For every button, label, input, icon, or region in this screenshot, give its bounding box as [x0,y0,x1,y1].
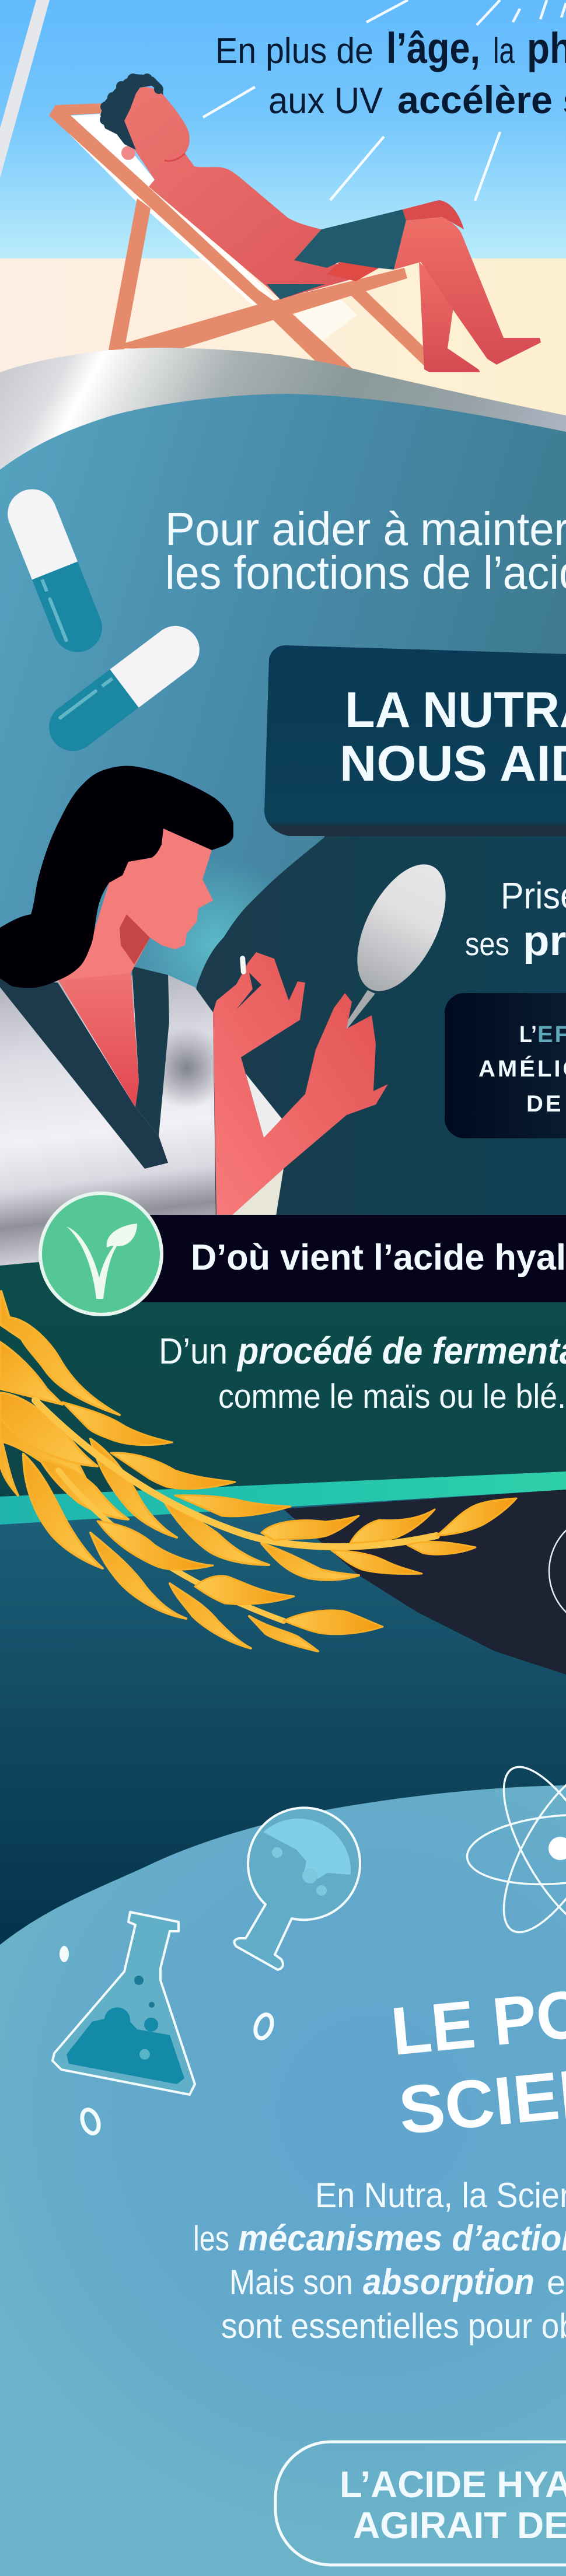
hair [0,766,233,988]
back leg [419,262,480,372]
arms and hands [213,952,388,1216]
face and neck [58,829,213,980]
neck shadow [120,914,150,964]
neck crease [165,153,185,161]
intro text [215,24,566,121]
intro text: En plus de [215,31,373,71]
intro text: l’âge, [386,24,480,72]
intro text: la [493,31,515,71]
icon: erlenmeyer flask [53,1912,195,2095]
swim shorts [294,209,406,270]
white pole [0,0,50,178]
sand [0,258,566,422]
deck chair [49,103,427,373]
collar [0,978,168,1169]
callout capsule: AGIRAIT DE [353,2504,566,2546]
coat patch by arm [246,1074,284,1138]
section background [0,394,566,1219]
torso and head [124,87,379,299]
hair [100,74,163,150]
paragraph: les [193,2219,229,2258]
dark wedge [283,1490,566,1675]
icon: capsule two [40,616,209,761]
wheat illustration [0,1291,516,1651]
navy background [0,1488,566,1984]
light glow [128,858,303,1033]
title [388,1974,566,2148]
intro text [165,503,566,599]
chest [58,945,139,1107]
hand on hip [327,262,379,281]
text: prized for [465,875,566,964]
callout box [445,993,566,1138]
icon: vegan badge [40,1193,162,1315]
icon: ring droplet [253,2012,275,2040]
pill in fingers [240,956,246,974]
light blue dome [0,1785,566,2576]
paragraph [193,2176,566,2346]
intro text: aux UV [268,81,383,121]
icon: ring droplet two [79,2107,102,2135]
paragraph: Mais son [229,2263,353,2302]
callout box: L’ [519,1022,537,1047]
lab coat [0,975,216,1266]
callout capsule [275,2442,566,2565]
origin text [159,1330,566,1415]
callout box: DE [526,1091,564,1117]
outline circle [549,1514,566,1629]
woman with pill and mirror [0,766,464,1266]
origin text: D’un [159,1331,228,1372]
panel: science section [0,1752,566,2576]
knee [403,200,464,229]
icon: atom [464,1752,566,1948]
icon: capsule one [1,482,109,659]
text: prized for: ses [465,925,509,962]
sun rays [203,0,566,201]
sky [0,0,566,259]
panel: beach scene [0,0,566,422]
heading box [264,645,566,836]
dark curved backdrop [175,834,566,1219]
heading bar [140,1215,566,1302]
gap between fingers [236,973,261,1009]
ear [121,146,135,160]
panel: nutraceutical section [0,394,566,1266]
green background [0,1215,566,1502]
callout capsule: L’ACIDE HYA [340,2463,566,2505]
sunbather [100,74,541,372]
panel: origin section [0,1193,566,1984]
icon: solid droplet [60,1946,69,1962]
intro text: accélère [397,78,553,121]
icon: round flask [234,1808,360,1970]
hand mirror [339,851,464,1032]
heading bar: D’où vient l’acide hyal [191,1238,566,1278]
front leg [394,217,541,365]
paragraph: absorption [363,2262,534,2302]
metallic dome [0,348,566,525]
teal stripe [0,1471,566,1525]
